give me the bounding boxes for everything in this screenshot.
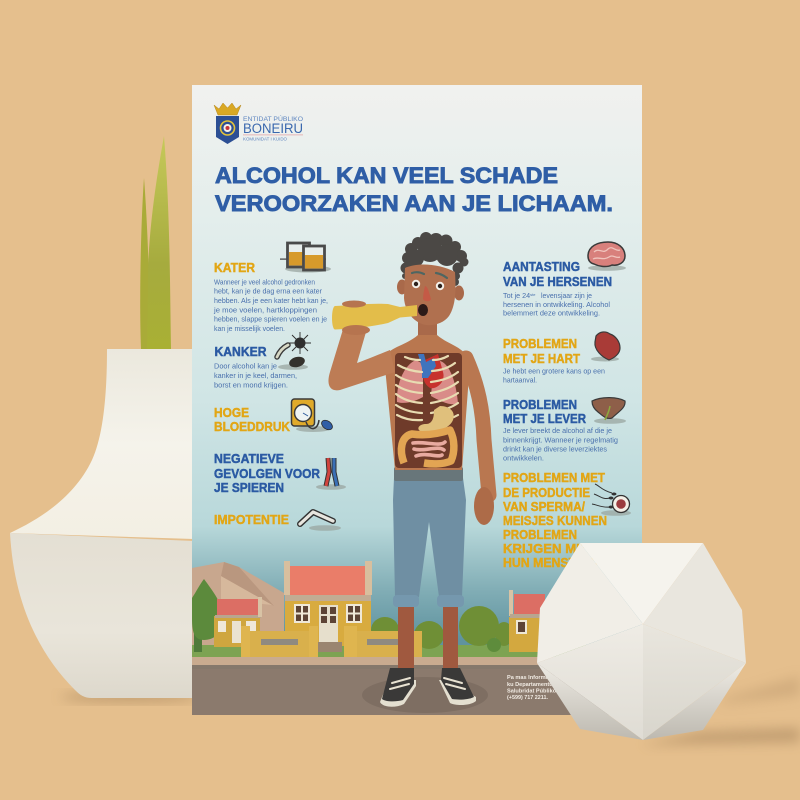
logo name: BONEIRU [243, 121, 303, 136]
contact text [507, 675, 563, 701]
nose [423, 286, 431, 301]
icon: brain [588, 242, 626, 271]
ears [397, 280, 464, 300]
section: sperma: KRIJGEN MET [503, 542, 593, 556]
trousers [393, 467, 466, 607]
section: kanker: Door alcohol kan je [214, 362, 277, 370]
icon: whisky glasses [280, 243, 331, 272]
exposed organs [395, 353, 462, 468]
section: sperma: VAN SPERMA/ [503, 500, 586, 514]
vase [10, 349, 194, 698]
chest cavity [395, 353, 462, 468]
section: negatieve gevolgen: GEVOLGEN VOOR [214, 467, 320, 481]
eyes [412, 280, 444, 290]
contact text: ku Departamentu di [507, 682, 560, 688]
icon: liver [592, 398, 626, 424]
mouth [418, 304, 428, 316]
hair [400, 232, 468, 286]
section: negatieve gevolgen: JE SPIEREN [214, 481, 284, 495]
logo name: ENTIDAT PÚBLIKO [243, 114, 303, 123]
section: hersenen: Tot je 24 [503, 291, 530, 300]
heart and vessels [418, 354, 444, 388]
section: hersenen [503, 260, 612, 318]
face [404, 265, 455, 325]
section: hersenen: belemmert deze ontwikkeling. [503, 308, 600, 318]
section: lever: MET JE LEVER [503, 412, 586, 426]
section: hersenen: levensjaar zijn je [541, 291, 592, 300]
section: lever: Je lever breekt de alcohol af die je [503, 426, 612, 435]
section: lever: ontwikkelen. [503, 454, 544, 462]
section: negatieve gevolgen [214, 452, 320, 495]
icon: sperm and egg [592, 484, 631, 516]
section: hart: hartaanval. [503, 376, 537, 384]
section: kater: je moe voelen, hartkloppingen [213, 305, 317, 314]
section: negatieve gevolgen: NEGATIEVE [214, 452, 284, 466]
icon: heart [591, 332, 620, 362]
bottle [332, 304, 417, 330]
title [215, 163, 613, 216]
poster background [192, 85, 642, 715]
section: hersenen: VAN JE HERSENEN [503, 275, 612, 289]
small house [214, 597, 262, 647]
section: lever [503, 398, 618, 462]
section: lever: drinkt kan je diverse leverziektes [503, 444, 607, 454]
section: sperma: MEISJES KUNNEN [503, 514, 607, 528]
poster [192, 85, 642, 715]
garden walls [241, 626, 422, 657]
sidewalk [192, 657, 642, 665]
icon: blood pressure meter [292, 399, 334, 432]
section: hoge bloeddruk: BLOEDDRUK [214, 420, 290, 434]
section: hersenen: AANTASTING [503, 260, 580, 274]
section: hart: MET JE HART [503, 352, 580, 366]
logo shield [216, 116, 239, 144]
lungs [397, 360, 458, 404]
contact text: (+599) 717 2211. [507, 695, 548, 701]
left arm [466, 358, 494, 525]
section: kanker: kanker in je keel, darmen, [214, 371, 297, 380]
ribs [396, 356, 458, 420]
section: hart: Je hebt een grotere kans op een [503, 366, 605, 376]
ground shadows [60, 676, 800, 745]
section: kater: hebben. Als je een kater hebt kan je, [214, 296, 328, 305]
logo name: KOMUNIDAT I KUIDO [243, 136, 288, 142]
title: VEROORZAKEN AAN JE LICHAAM. [215, 191, 613, 216]
windows and door [294, 604, 362, 642]
icon: blood vessels [316, 458, 346, 490]
hand on bottle [342, 300, 370, 335]
section: kanker: KANKER [214, 345, 266, 359]
section: hoge bloeddruk [214, 406, 290, 434]
stomach [418, 406, 454, 432]
contact text: Pa mas Informashon [507, 675, 563, 681]
logo crown [214, 103, 241, 115]
icon: bent wrench [300, 512, 341, 531]
section: kater: Wanneer je veel alcohol gedronken [214, 277, 315, 286]
foot shadow [362, 677, 488, 713]
small intestine [413, 442, 445, 456]
section: lever: binnenkrijgt. Wanneer je regelmatig [503, 436, 618, 444]
main house [284, 561, 372, 652]
section: sperma: PROBLEMEN MET [503, 471, 605, 485]
right house [509, 590, 545, 652]
grass [192, 645, 642, 658]
section: impotentie: IMPOTENTIE [214, 513, 289, 527]
neck [418, 318, 437, 344]
street scene [192, 561, 642, 715]
section: kater: kan je misselijk voelen. [214, 324, 285, 333]
section: kanker: borst en mond krijgen. [214, 380, 288, 390]
logo name [243, 114, 303, 142]
section: hersenen: hersenen in ontwikkeling. Alcohol [503, 300, 610, 309]
road [192, 669, 642, 715]
curb [192, 665, 642, 669]
section: hoge bloeddruk: HOGE [214, 406, 249, 420]
bushes [371, 606, 513, 652]
section: kater: KATER [214, 261, 255, 275]
section: hart: PROBLEMEN [503, 337, 577, 351]
section: sperma: HUN MENSTRUATIE [503, 556, 621, 570]
section: lever: PROBLEMEN [503, 398, 577, 412]
eyebrows [412, 272, 447, 278]
contact text: Salubridat Públiko [507, 688, 557, 694]
legs [398, 605, 458, 670]
section: kanker [214, 345, 297, 390]
section: kater: hebt, kan je de dag erna een kater [214, 287, 323, 296]
section: sperma [503, 471, 621, 570]
tree [192, 579, 224, 652]
stone shape [537, 543, 746, 740]
icon: germs [277, 332, 311, 370]
title: ALCOHOL KAN VEEL SCHADE [215, 163, 558, 188]
section: sperma: PROBLEMEN [503, 528, 577, 542]
section: kater: hebben, slappe spieren voelen en je [214, 315, 327, 324]
plant leaves [140, 136, 171, 349]
character [328, 232, 494, 707]
logo [214, 103, 303, 144]
section: kater [213, 261, 328, 333]
arm holding bottle [328, 326, 395, 390]
mountain [192, 562, 284, 657]
section: hersenen: ste [530, 292, 536, 297]
large intestine [401, 430, 454, 464]
torso [384, 335, 470, 470]
shoes [380, 668, 476, 707]
section: sperma: DE PRODUCTIE [503, 486, 590, 500]
section: hart [503, 337, 605, 384]
